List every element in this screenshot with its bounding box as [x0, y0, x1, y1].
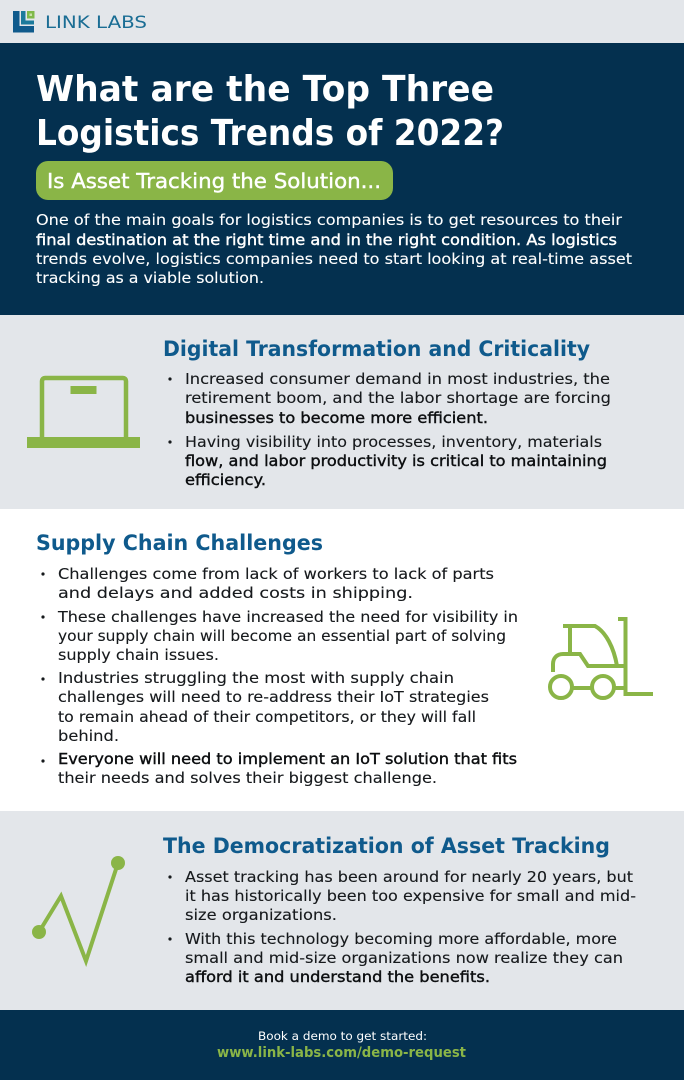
subtitle pill [36, 161, 393, 200]
panel: digital transformation [0, 315, 684, 509]
panel: supply chain [0, 509, 684, 811]
subtitle pill: Is Asset Tracking the Solution... [47, 169, 381, 193]
footer prompt: Book a demo to get started: [258, 1029, 427, 1043]
panel: introduction [0, 43, 684, 315]
bullet list: supply chain: and delays and added costs in shipping. [58, 584, 413, 602]
bullet list: democratization: it has historically been too expensive for small and mid- [185, 887, 636, 905]
icon: forklift [550, 619, 653, 698]
bullet list: supply chain: Industries struggling the most with supply chain [58, 669, 454, 687]
header band with logo [0, 0, 684, 43]
intro paragraph [36, 211, 632, 287]
bullet list: digital transformation: Increased consumer demand in most industries, the [185, 370, 610, 388]
intro paragraph: trends evolve, logistics companies need to start looking at real-time asset [36, 250, 632, 268]
bullet list: digital transformation: businesses to become more efficient. [185, 409, 488, 427]
bullet list: digital transformation [168, 370, 611, 489]
bullet list: supply chain: your supply chain will become an essential part of solving [58, 627, 506, 645]
bullet list: democratization: With this technology becoming more affordable, more [185, 930, 617, 948]
icon: laptop [27, 378, 140, 448]
icon: Link Labs logo [13, 11, 34, 32]
footer link: www.link-labs.com/demo-request [217, 1045, 466, 1061]
icon: trend line [32, 856, 125, 961]
bullet list: supply chain: to remain ahead of their competitors, or they will fall [58, 708, 476, 726]
bullet list: supply chain: Everyone will need to implement an IoT solution that fits [58, 750, 517, 768]
title [36, 69, 504, 154]
bullet list: digital transformation: Having visibility into processes, inventory, materials [185, 433, 602, 451]
panel: footer [0, 1010, 684, 1080]
bullet list: democratization: size organizations. [185, 906, 337, 924]
bullet list: democratization [168, 868, 636, 986]
heading: democratization: The Democratization of Asset Tracking [163, 834, 610, 858]
bullet list: supply chain: their needs and solves their biggest challenge. [58, 769, 437, 787]
bullet list: digital transformation: flow, and labor productivity is critical to maintaining [185, 452, 607, 470]
bullet list: supply chain: challenges will need to re-address their IoT strategies [58, 688, 489, 706]
bullet list: supply chain: These challenges have increased the need for visibility in [57, 608, 518, 626]
heading: supply chain: Supply Chain Challenges [36, 531, 323, 555]
intro paragraph: tracking as a viable solution. [36, 269, 264, 287]
bullet list: democratization: small and mid-size organizations now realize they can [185, 949, 623, 967]
bullet list: democratization: Asset tracking has been around for nearly 20 years, but [185, 868, 633, 886]
logo wordmark: LINK LABS [45, 13, 147, 33]
title: Logistics Trends of 2022? [36, 113, 504, 154]
heading: digital transformation: Digital Transformation and Criticality [163, 337, 590, 361]
title: What are the Top Three [36, 69, 494, 110]
panel: democratization [0, 811, 684, 1010]
intro paragraph: One of the main goals for logistics companies is to get resources to their [36, 211, 623, 229]
bullet list: supply chain: supply chain issues. [58, 646, 219, 664]
bullet list: digital transformation: retirement boom, and the labor shortage are forcing [185, 389, 611, 407]
bullet list: supply chain: behind. [58, 727, 119, 745]
bullet list: digital transformation: efficiency. [185, 471, 266, 489]
intro paragraph: final destination at the right time and in the right condition. As logistics [36, 231, 617, 249]
bullet list: supply chain [41, 565, 518, 787]
bullet list: supply chain: Challenges come from lack of workers to lack of parts [58, 565, 494, 583]
bullet list: democratization: afford it and understand the benefits. [185, 968, 490, 986]
